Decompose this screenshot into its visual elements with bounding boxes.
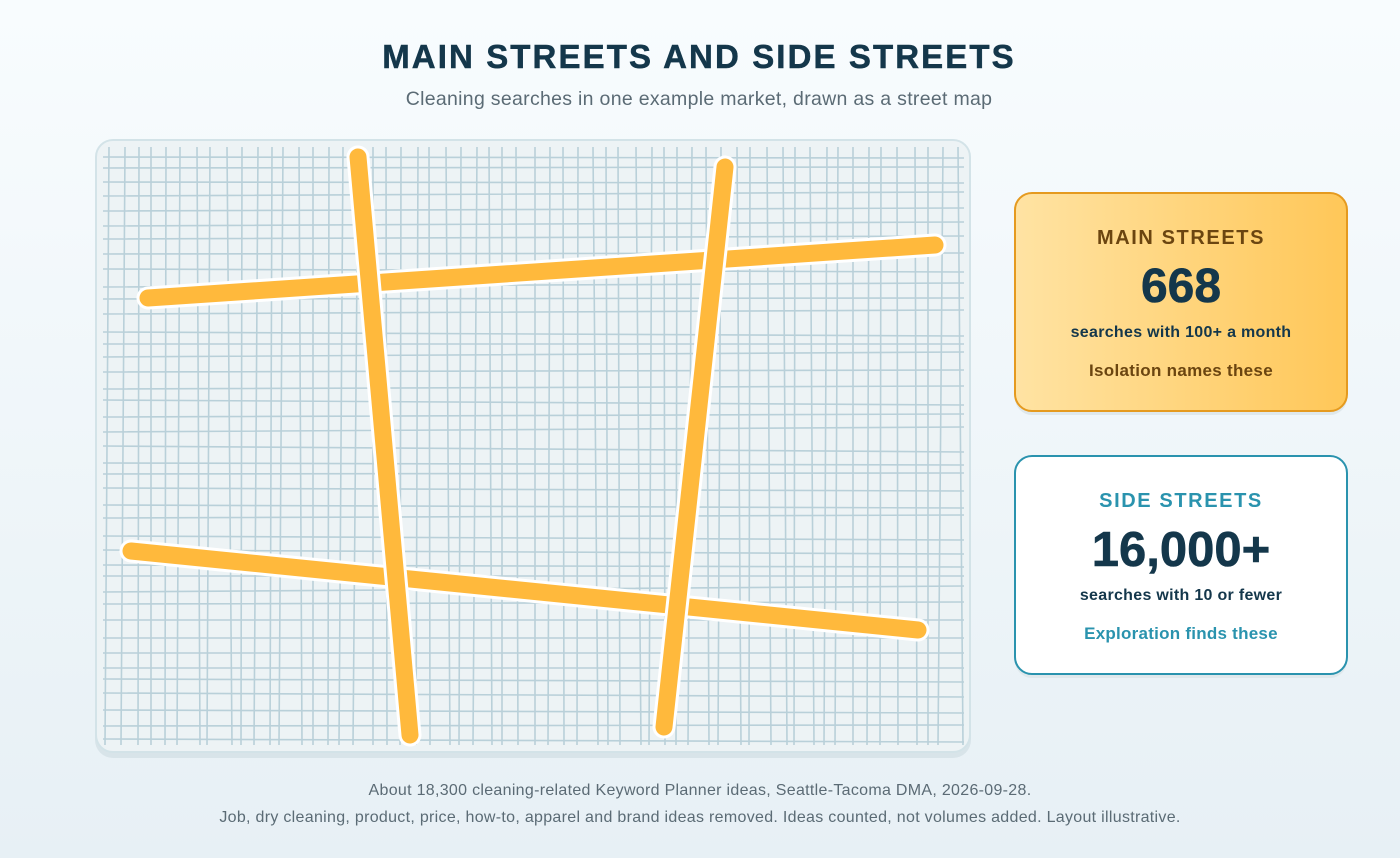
card: side streets (1015, 456, 1347, 678)
main street: upper east-west (148, 245, 935, 298)
stat: 16,000+ (1092, 523, 1270, 577)
card label: SIDE STREETS (1099, 490, 1263, 512)
main street: right north-south (664, 167, 725, 727)
side street grid (103, 147, 964, 745)
main street: lower east-west (131, 551, 918, 630)
subtitle: Cleaning searches in one example market, drawn as a street map (406, 88, 992, 110)
card: main streets (1015, 193, 1347, 415)
stat description: searches with 100+ a month (1071, 324, 1291, 341)
footnote: About 18,300 cleaning-related Keyword Planner ideas, Seattle-Tacoma DMA, 2026-09-28. (369, 782, 1031, 799)
panel: street map (95, 140, 971, 758)
main street: left north-south (358, 157, 410, 735)
card note: Isolation names these (1089, 361, 1273, 380)
card label: MAIN STREETS (1097, 227, 1265, 249)
card note: Exploration finds these (1084, 624, 1278, 643)
stat description: searches with 10 or fewer (1080, 587, 1282, 604)
footnote: Job, dry cleaning, product, price, how-to, apparel and brand ideas removed. Ideas counted, not volumes added. Layout illustrative. (219, 809, 1181, 826)
footnote (219, 782, 1181, 826)
stat: 668 (1141, 260, 1221, 313)
title: MAIN STREETS AND SIDE STREETS (382, 38, 1016, 75)
